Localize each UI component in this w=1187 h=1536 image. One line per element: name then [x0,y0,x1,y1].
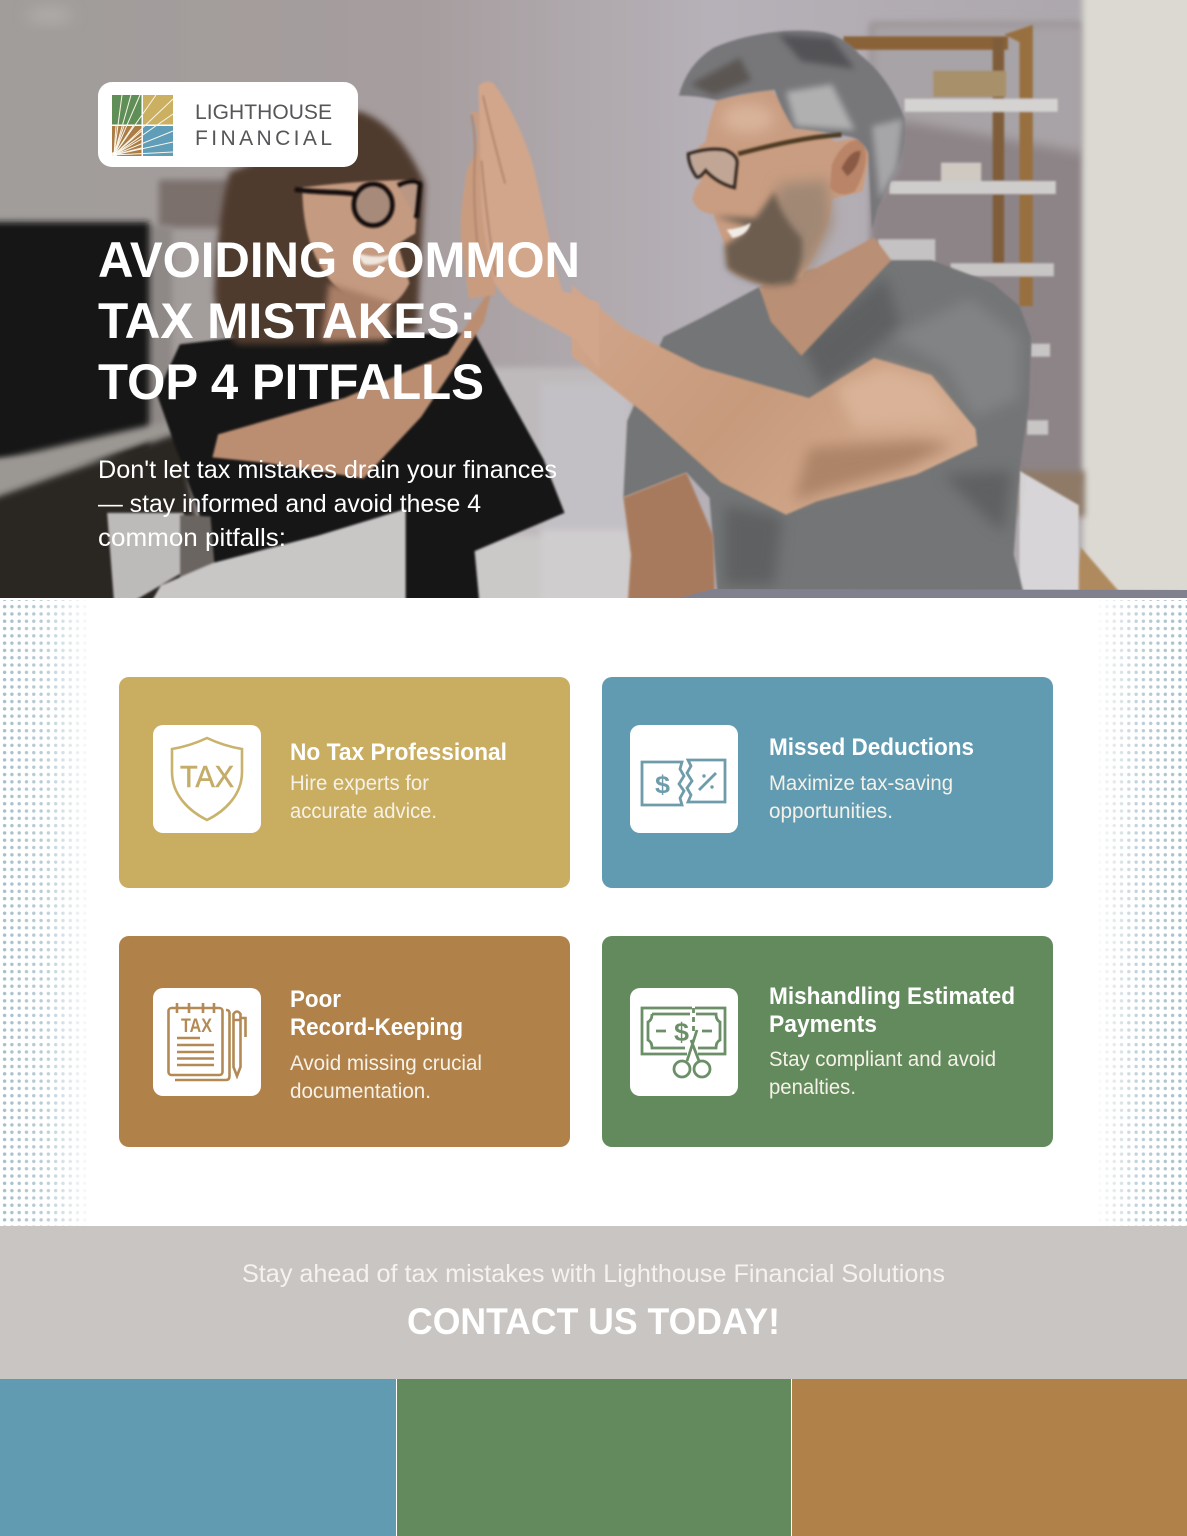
call-to-action band [0,1226,1187,1379]
panel: missed deductions [602,677,1053,888]
intro text: common pitfalls: [98,524,286,552]
heading and description: No Tax Professional [290,739,507,766]
heading and description: Hire experts for [290,772,429,795]
panel: mishandling estimated payments [602,936,1053,1147]
icon: torn receipt: $ [655,771,670,799]
man [572,31,1031,612]
icon: banknote and scissors: $ [674,1017,690,1047]
man's face [690,88,870,287]
colour block: green [397,1379,791,1536]
logo wordmark: LIGHTHOUSE [195,101,332,124]
colour block: brown [792,1379,1187,1536]
icon: tax shield [153,725,261,833]
intro text [98,456,557,552]
man's raised forearm and upper arm [572,285,977,515]
shirt shadow folds [725,276,1012,586]
man's glasses [688,135,841,188]
heading and description: Mishandling Estimated [769,983,1015,1010]
title: TAX MISTAKES: [98,293,476,349]
icon: torn receipt [630,725,738,833]
forehead highlight [721,103,775,134]
heading and description: Missed Deductions [769,734,974,761]
woman's black shirt [157,333,564,612]
heading and description: penalties. [769,1076,856,1099]
logo badge [98,82,358,167]
icon: banknote and scissors [630,988,738,1096]
title: TOP 4 PITFALLS [98,354,484,410]
heading and description [769,734,974,823]
man's ear [830,140,866,194]
icon: tax shield: TAX [180,759,234,794]
panel: no tax professional [119,677,570,888]
halftone dots right [1095,600,1187,1226]
finger creases [471,96,505,276]
icon: tax notepad and pen [153,988,261,1096]
heading and description [769,983,1015,1099]
woman [107,111,564,612]
heading and description: accurate advice. [290,800,437,823]
heading and description: documentation. [290,1080,431,1103]
sofa and laptop in front of woman [106,508,408,598]
shirt light area [902,302,1020,412]
logo wordmark: FINANCIAL [195,127,332,150]
man's hair [679,31,905,230]
woman's hand [461,111,498,299]
hero photo: two people high-fiving [0,0,1187,620]
halftone dots left [0,600,92,1226]
heading and description: Record-Keeping [290,1014,463,1041]
blurred room background, left [0,7,685,620]
colour block: blue [0,1379,396,1536]
heading and description: Poor [290,986,341,1013]
logo mark: four sunburst squares [111,95,173,158]
man's neck [759,237,891,356]
heading and description: Stay compliant and avoid [769,1048,996,1071]
panel: poor record-keeping [119,936,570,1147]
man's hand in high five [471,81,599,369]
heading and description: Payments [769,1011,877,1038]
woman's neck [321,283,390,341]
heading and description [290,986,482,1103]
title [98,232,580,410]
woman's arm [212,283,494,478]
woman's hair [214,111,425,344]
arm shading [794,440,954,501]
woman's face [302,180,419,306]
contact heading: CONTACT US TODAY! [407,1301,780,1342]
woman's smile [360,253,389,266]
intro text: — stay informed and avoid these 4 [98,490,481,518]
logo wordmark [195,101,332,150]
heading and description: Maximize tax-saving [769,772,953,795]
man's lower arm [623,473,715,612]
laptop edge at the bottom [679,589,1187,598]
tagline: Stay ahead of tax mistakes with Lighthouse Financial Solutions [242,1260,945,1288]
hair highlights and strands [690,34,903,199]
heading and description: Avoid missing crucial [290,1052,482,1075]
man's t-shirt [623,260,1031,591]
arm highlight [836,367,954,429]
smile [727,223,751,238]
woman's glasses [295,181,420,225]
heading and description: opportunities. [769,800,893,823]
man's stubble [771,180,832,276]
title: AVOIDING COMMON [98,232,580,288]
sofa behind the man [547,387,623,526]
man's beard [713,191,802,286]
heading and description [290,739,507,823]
icon: tax notepad and pen: TAX [181,1016,212,1037]
intro text: Don't let tax mistakes drain your finances [98,456,557,484]
blurred room background, right [541,0,1187,612]
